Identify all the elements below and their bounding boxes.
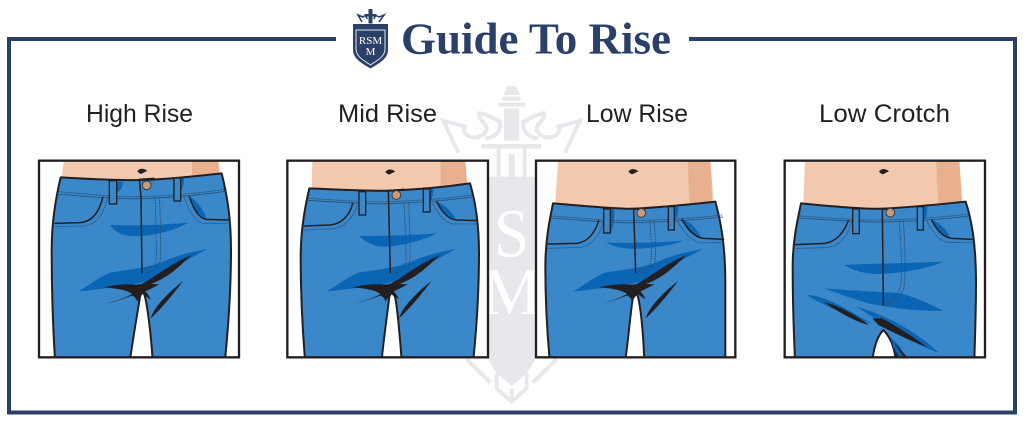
logo: crest [353, 9, 388, 68]
logo: crest: RSM [359, 35, 382, 47]
panel: mid rise jeans [287, 160, 488, 360]
watermark: crest: S [494, 196, 529, 272]
heading: Low Rise: Low Rise [586, 100, 688, 128]
heading: Low Crotch: Low Crotch [819, 100, 950, 128]
title: Guide To Rise [401, 14, 671, 64]
panel: high rise jeans [39, 160, 239, 360]
heading: High Rise: High Rise [86, 100, 193, 128]
watermark: crest: M [482, 256, 541, 329]
panel: low crotch jeans [785, 160, 985, 360]
logo: crest: M [366, 46, 376, 58]
panel: low rise jeans [536, 160, 735, 360]
watermark: crest [410, 86, 617, 402]
heading: Mid Rise: Mid Rise [338, 100, 437, 128]
